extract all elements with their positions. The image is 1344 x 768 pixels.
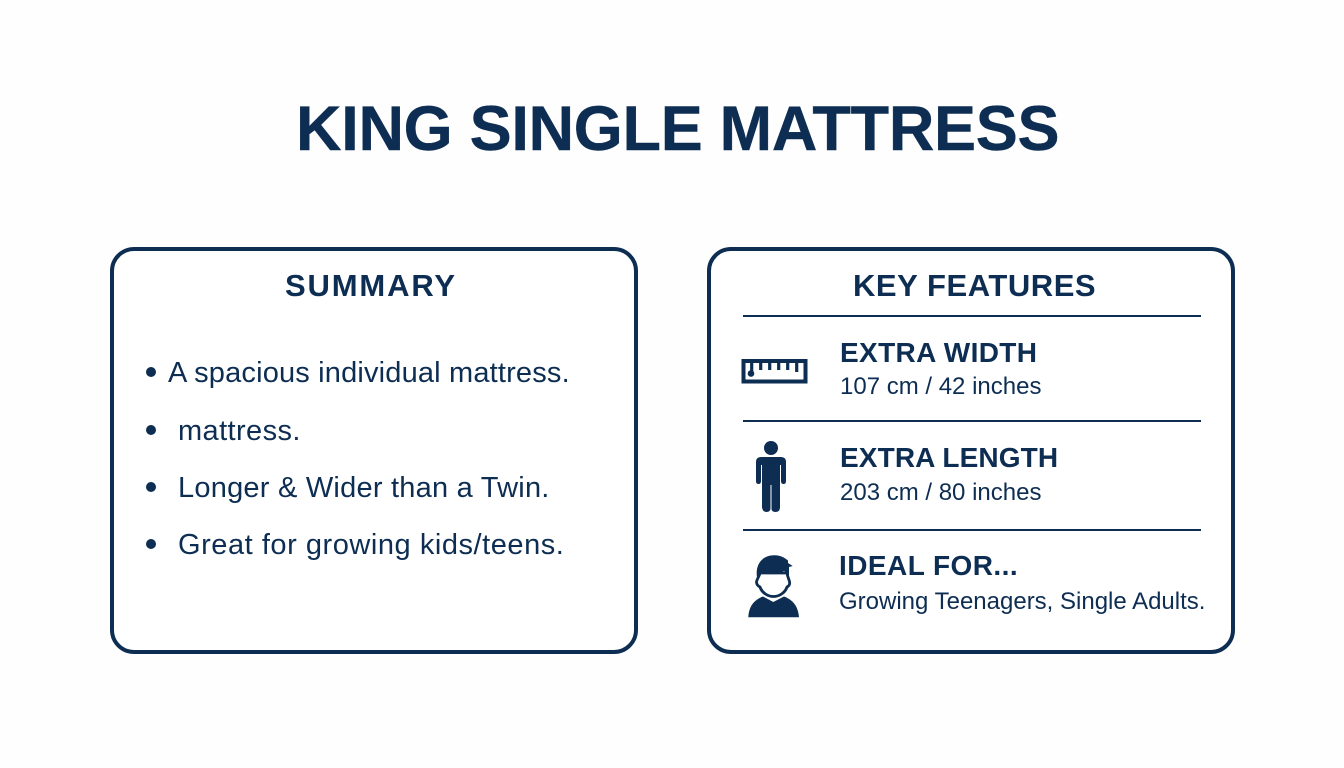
title: KING SINGLE MATTRESS	[296, 94, 1059, 164]
bullet item 1: A spacious individual mattress.	[168, 357, 570, 389]
icon: standing person	[756, 441, 786, 512]
bullet dot 2	[146, 425, 156, 435]
bullet dot 4	[146, 539, 156, 549]
icon: teen bust	[748, 555, 799, 618]
panel: summary	[110, 247, 638, 654]
feature: extra length label: EXTRA LENGTH	[840, 442, 1058, 473]
bullet item 3: Longer & Wider than a Twin.	[178, 472, 550, 504]
feature: extra width label: EXTRA WIDTH	[840, 337, 1037, 368]
heading: summary: SUMMARY	[285, 268, 457, 303]
feature: ideal for label: IDEAL FOR...	[839, 550, 1018, 581]
panel: key features	[707, 247, 1235, 654]
bullet item 4: Great for growing kids/teens.	[178, 529, 564, 561]
feature: extra length value: 203 cm / 80 inches	[840, 479, 1041, 506]
feature: ideal for value: Growing Teenagers, Single Adults.	[839, 588, 1205, 615]
feature: extra width value: 107 cm / 42 inches	[840, 373, 1041, 400]
icon: ruler	[742, 359, 808, 384]
heading: key features: KEY FEATURES	[853, 268, 1096, 303]
summary bullet list	[146, 357, 570, 561]
bullet item 2: mattress.	[178, 415, 301, 447]
bullet dot 3	[146, 482, 156, 492]
bullet dot 1	[146, 367, 156, 377]
